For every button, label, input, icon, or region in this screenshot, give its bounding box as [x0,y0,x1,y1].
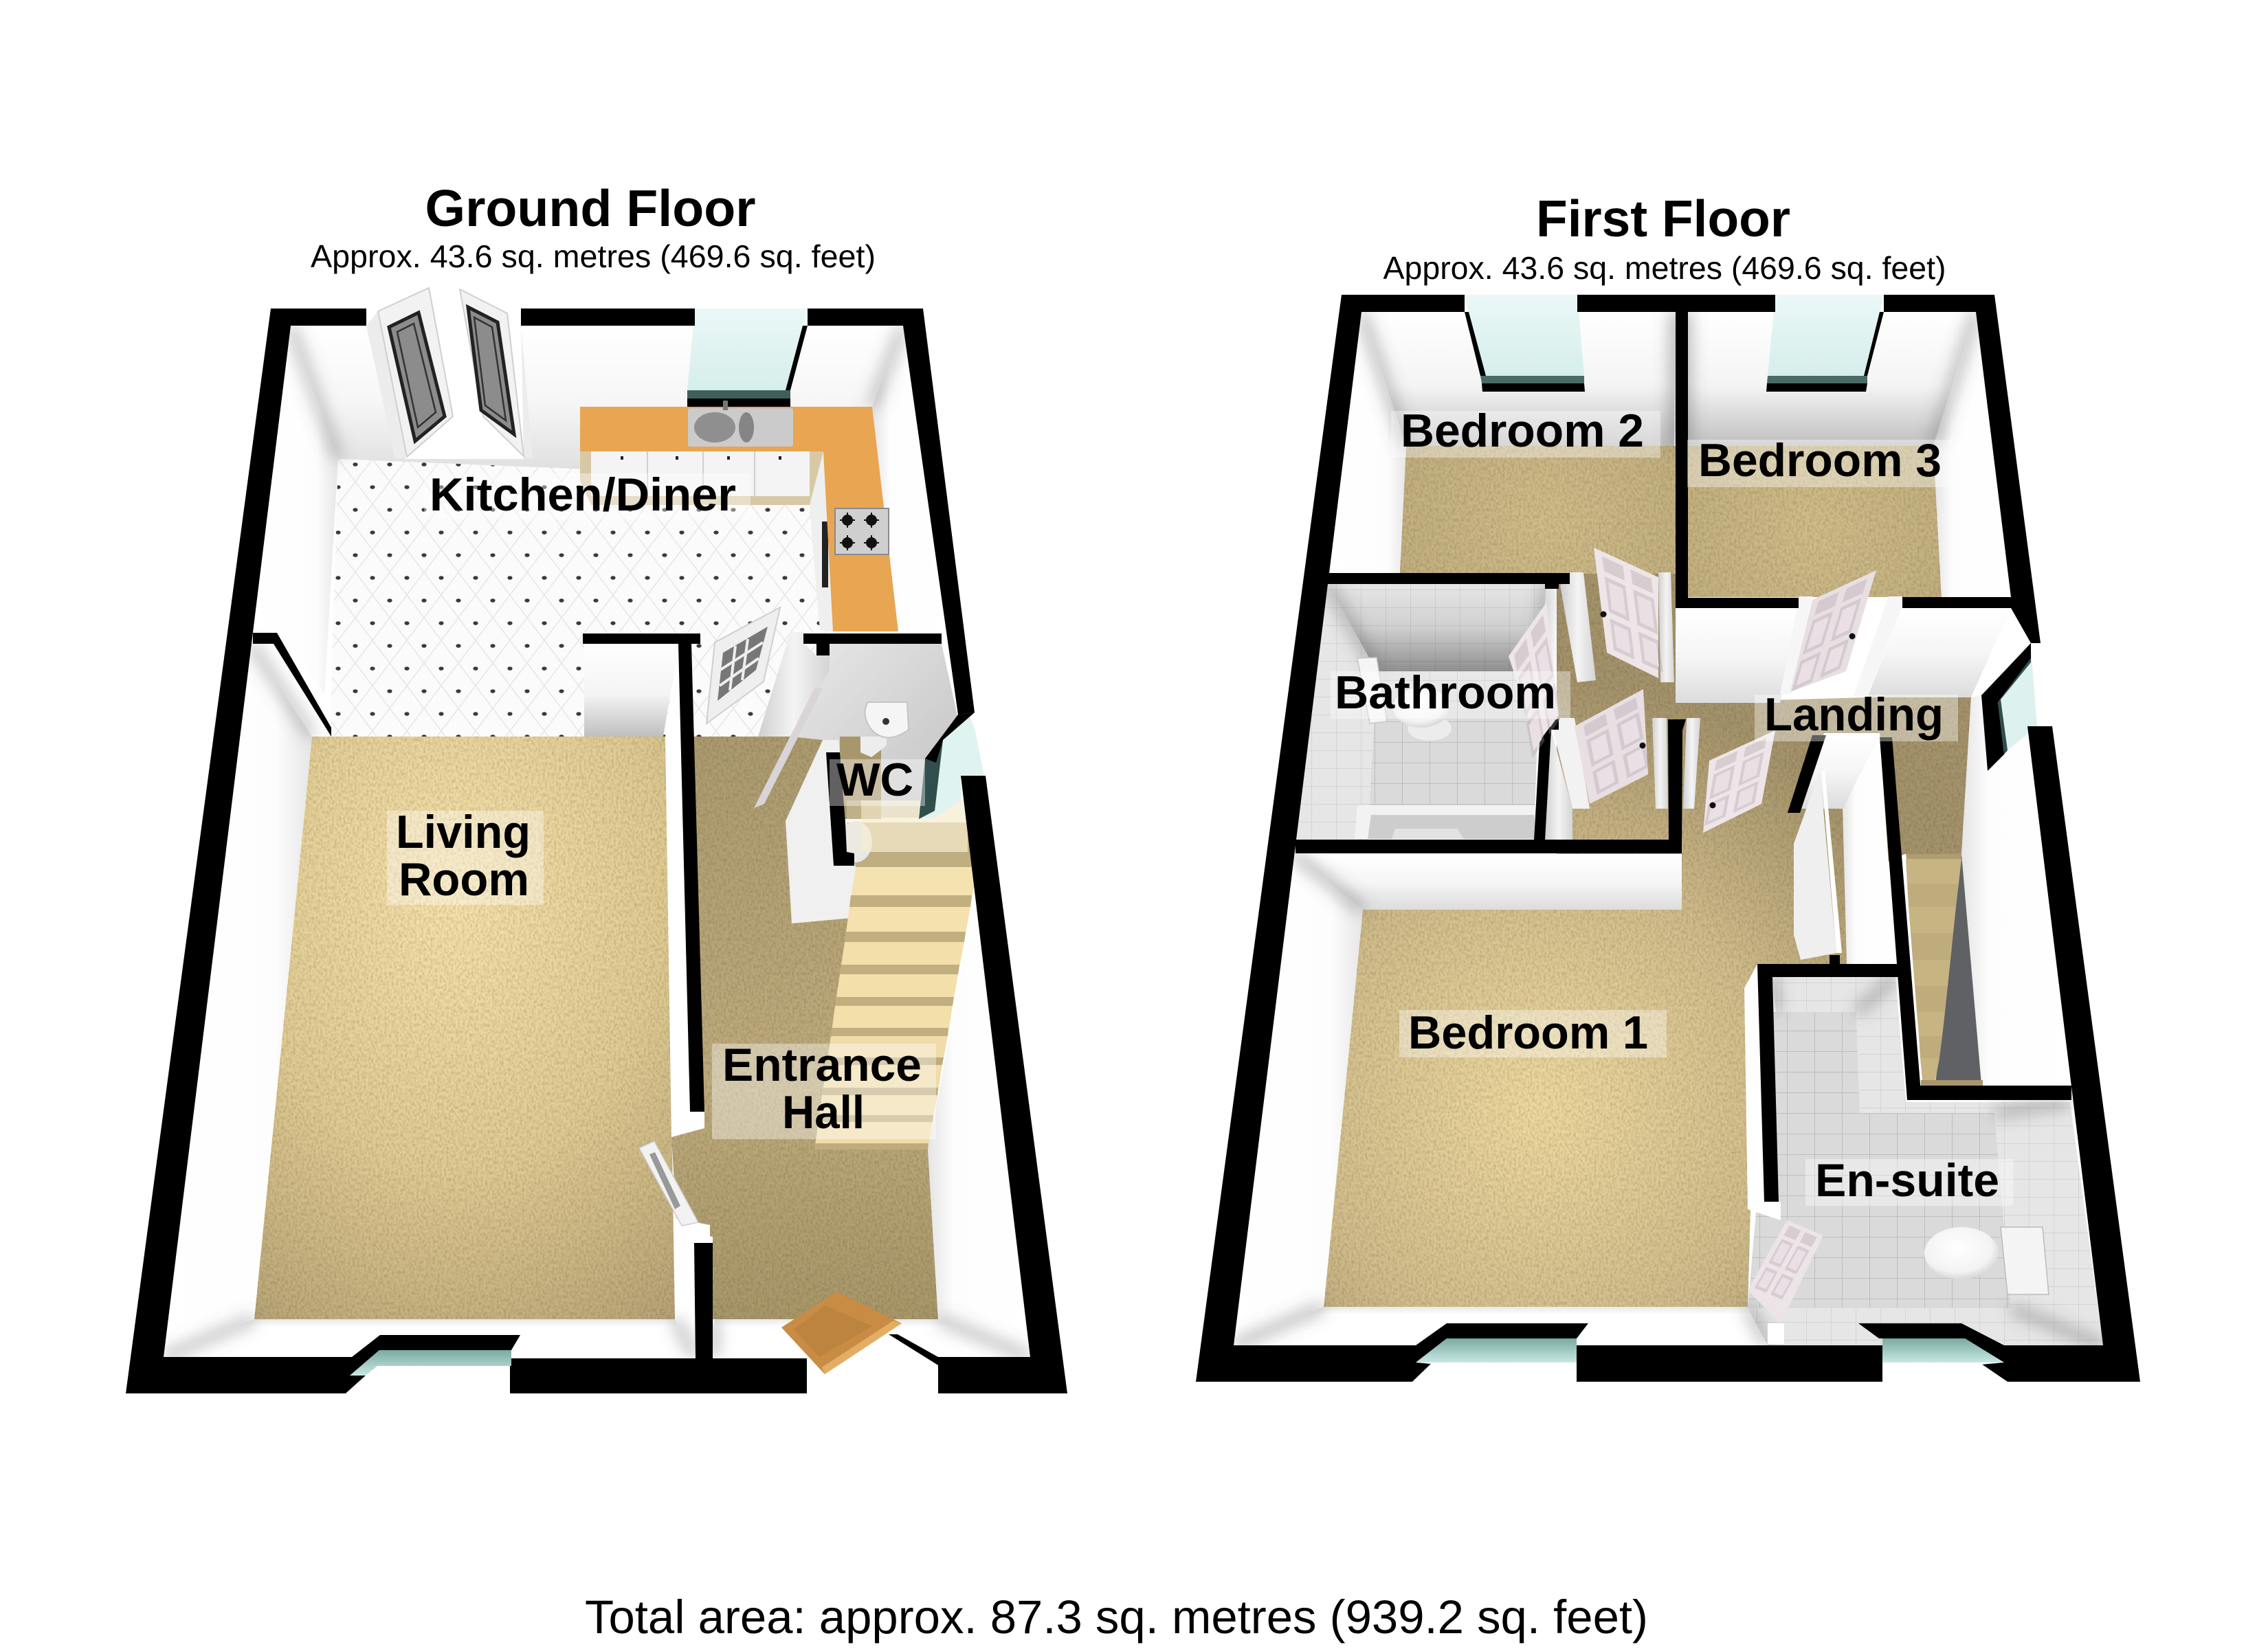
label: entrance hall [712,1039,936,1139]
floor: entrance hall carpet [671,737,938,1319]
kitchen units and worktop [580,407,898,631]
icon: WC basin [865,702,909,738]
label: bedroom 2: Bedroom 2 [1401,405,1644,457]
doors: rear french doors [366,288,533,459]
door: bedroom 3 door [1790,570,1876,692]
icon: kitchen sink [688,401,793,447]
window: bedroom 3 [1766,295,1884,392]
label: living room: Living [396,806,531,858]
label: bedroom 1: Bedroom 1 [1408,1007,1648,1059]
stairs: ground floor [814,800,990,1149]
door: bedroom 1 door [1703,730,1775,833]
walls: kitchen and living faces [164,326,1030,1393]
door: hall to kitchen glazed door [707,607,780,723]
door: bathroom door [1509,603,1561,759]
stairs: first floor [1906,854,1983,1086]
door: WC door [754,687,823,808]
icon: gas hob [835,508,889,554]
text: total area: Total area: approx. 87.3 sq. metres (939.2 sq. feet) [585,1591,1648,1644]
floor: living room carpet [254,737,675,1319]
label: bedroom 3: Bedroom 3 [1698,434,1942,486]
door: front entrance door [781,1292,902,1374]
window: landing side [1981,643,2037,771]
floor: bedroom 3 carpet [1687,446,1942,597]
floor: en-suite tiles [1748,1012,2011,1308]
heading: first floor title: First Floor [1536,190,1790,247]
walls: ground floor black wall tops [126,309,1067,1393]
door: closet door [1575,689,1649,804]
door: bedroom 2 door [1594,548,1663,678]
label: living room: Room [399,853,529,906]
walls: first floor black wall tops [1196,295,2140,1382]
window: kitchen rear [687,309,808,407]
window: bedroom 2 [1465,295,1585,392]
icon: bathroom toilet [1357,658,1452,741]
label: kitchen diner: Kitchen/Diner [430,469,736,521]
door: living room door [639,1141,698,1226]
icon: en-suite toilet [1924,1227,2049,1294]
panel: first floor [1196,190,2140,1382]
room: WC [758,632,958,923]
floor: bathroom tiles [1368,671,1539,839]
label: living room [387,806,544,906]
label: landing: Landing [1764,688,1944,741]
text: ground floor area: Approx. 43.6 sq. metres (469.6 sq. feet) [311,238,876,274]
icon: bath [1355,805,1535,839]
floor: bedroom 2 carpet [1399,446,1676,584]
door: en-suite door [1748,1220,1823,1323]
heading: ground floor title: Ground Floor [425,179,756,237]
window: WC side [919,715,984,819]
label: WC: WC [836,754,913,806]
window: living room front [346,1350,511,1393]
walls: first floor faces [1234,312,2103,1345]
windows: first floor front [1412,1323,2008,1382]
floor: bedroom 1 and landing carpet [1324,574,1971,1308]
floor: kitchen diner tiles [330,459,835,737]
text: first floor area: Approx. 43.6 sq. metres (469.6 sq. feet) [1383,250,1946,286]
panel: ground floor [126,179,1067,1393]
label: entrance hall: Entrance [722,1039,922,1091]
label: entrance hall: Hall [782,1086,865,1138]
label: bathroom: Bathroom [1335,666,1556,719]
label: en-suite: En-suite [1815,1154,1999,1207]
